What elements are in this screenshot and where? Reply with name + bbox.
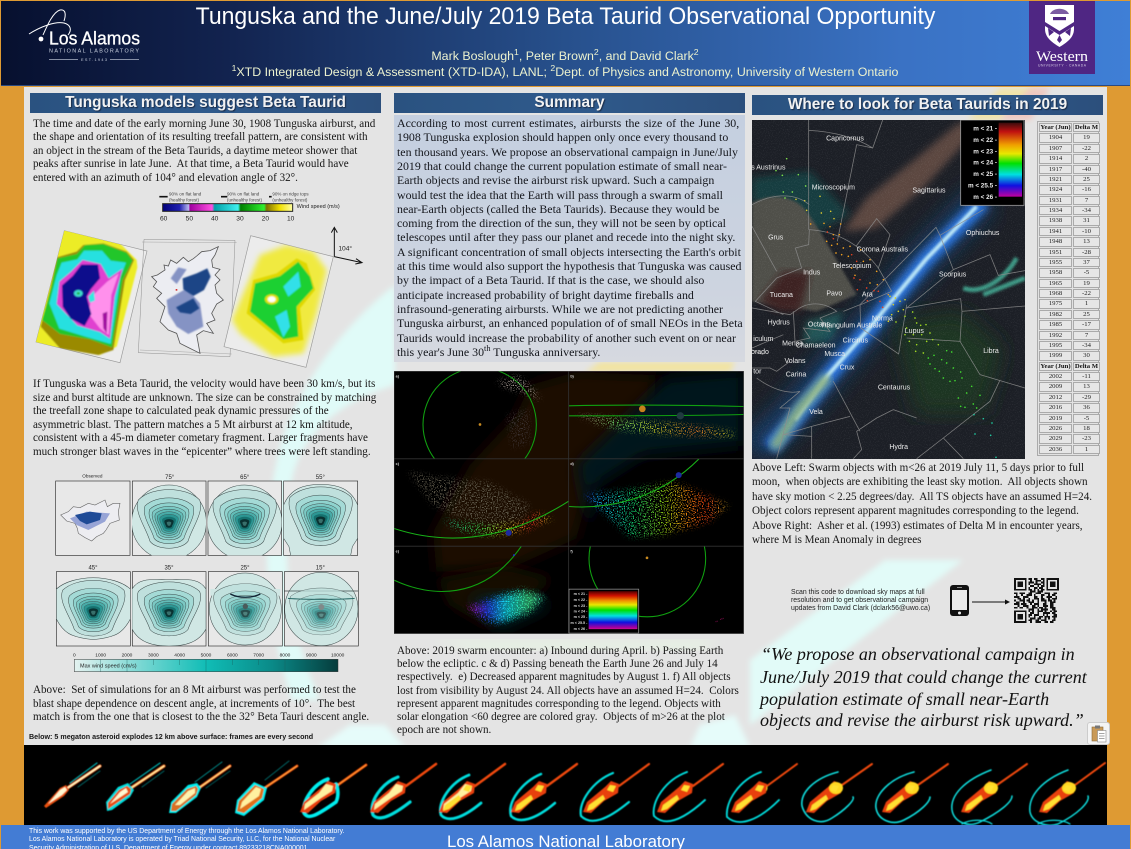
text block: swarm encounter caption: respectively. e) Decreased apparent magnitudes by August 1. f) All objects <box>397 671 731 683</box>
constellation labels: Musca <box>824 351 845 358</box>
constellation labels: Circinus <box>843 337 868 344</box>
table: Asher Delta M estimates: 1938 <box>1049 217 1062 224</box>
legend: max wind speed <box>73 653 345 672</box>
text block: Beta Taurid velocity: If Tunguska was a Beta Taurid, the velocity would have been 30 km/s, but its <box>33 378 375 390</box>
text block: swarm encounter caption: Above: 2019 swarm encounter: a) Inbound during April. b) Passing Earth <box>397 645 723 657</box>
panel e: decreased apparent magnitudes <box>394 546 550 628</box>
constellation labels: Corona Australis <box>857 246 909 253</box>
heading: Summary: Summary <box>534 94 605 111</box>
text block: swarm encounter caption <box>397 645 739 736</box>
title: Tunguska and the June/July 2019 Beta Taurid Observational Opportunity <box>196 3 935 30</box>
affiliations: 1XTD Integrated Design & Assessment (XTD-IDA), LANL; 2Dept. of Physics and Astronomy, University of Western Ontario <box>232 63 898 79</box>
map: right model <box>224 236 333 367</box>
text block: Beta Taurid velocity: asymmetric blast. The pattern matches a 5 Mt airburst at 12 km altitude, <box>33 418 353 430</box>
legend: apparent magnitude: m < 22 - <box>973 137 997 144</box>
text block: Tunguska intro: the shape and orientation of its resulting treefall pattern, are consistent with <box>33 131 368 143</box>
table: Asher Delta M estimates: 1982 <box>1049 311 1062 318</box>
chart: sky map <box>752 120 1025 459</box>
text block: summary <box>394 115 745 362</box>
frame 14 <box>952 764 1027 824</box>
table: Asher Delta M estimates: 13 <box>1083 383 1090 390</box>
text block: summary: at this time would also support the hypothesis that Tunguska was caused <box>397 259 741 273</box>
table: Asher Delta M estimates: -29 <box>1082 394 1091 401</box>
legend: wind speed colour bar: Wind speed (m/s) <box>297 204 340 210</box>
text block: QR code instructions: Scan this code to download sky maps at full <box>791 589 925 596</box>
constellation boundaries <box>752 120 1025 459</box>
legend: max wind speed: 8000 <box>280 653 291 659</box>
constellation labels: Telescopium <box>833 263 872 270</box>
constellation labels: Norma <box>872 316 893 323</box>
panel a: inbound during April: a) <box>396 375 400 379</box>
text block: swarm encounter caption: solar elongation <60 degree are colored gray. Objects of m>26 at the plot <box>397 711 725 723</box>
table: Asher Delta M estimates: 7 <box>1085 197 1088 204</box>
legend: apparent magnitude <box>569 589 639 633</box>
constellation labels: Microscopium <box>812 184 855 191</box>
text block: sky map caption <box>752 462 1092 546</box>
constellation labels: Capricornus <box>826 136 864 143</box>
table: Asher Delta M estimates: 1934 <box>1049 207 1062 214</box>
table: Asher Delta M estimates: 19 <box>1083 280 1090 287</box>
constellation labels: Pavo <box>826 290 842 297</box>
panel: observed: Observed <box>82 473 103 478</box>
table: Asher Delta M estimates: 2019 <box>1049 414 1062 422</box>
panel c: passing beneath Earth June 26 <box>394 462 569 538</box>
panel: poster background <box>24 87 1107 747</box>
table: Asher Delta M estimates: -10 <box>1082 228 1091 235</box>
text block: simulation caption: blast shape dependence on descent angle, at increments of 10°. The best <box>33 698 355 710</box>
table: Asher Delta M estimates: 1955 <box>1049 259 1062 266</box>
panel f: all objects lost from visibility <box>570 546 724 622</box>
panel: 35 degrees: 35° <box>164 566 174 572</box>
table: Asher Delta M estimates: 1992 <box>1049 332 1062 338</box>
frame 8 <box>510 764 577 820</box>
legend: wind speed colour bar <box>159 192 340 223</box>
constellation labels: Crux <box>840 364 855 371</box>
legend: max wind speed: 6000 <box>227 653 238 659</box>
asteroid dots <box>776 159 996 457</box>
logo: Los Alamos National Laboratory: EST.1943 <box>81 58 107 62</box>
frame 11 <box>727 764 797 822</box>
constellation labels: Hydrus <box>768 320 790 327</box>
constellation labels: Lupus <box>905 328 924 335</box>
table: Asher Delta M estimates: 1907 <box>1049 145 1062 152</box>
text block: summary: 1908 Tunguska explosion should happen only once every thousand to <box>397 130 728 144</box>
legend: max wind speed: 3000 <box>148 653 159 659</box>
legend: wind speed colour bar: (unhealthy forest) <box>227 198 263 203</box>
text block: swarm encounter caption: represent apparent magnitudes corresponding to the legend. Objects with <box>397 698 721 710</box>
constellation labels: Sagittarius <box>912 187 946 194</box>
table: Asher Delta M estimates: 1958 <box>1049 269 1062 276</box>
table: Asher Delta M estimates: 1917 <box>1049 166 1062 172</box>
footer: funding text <box>29 828 344 849</box>
text block: summary: A significant concentration of small objects intersecting the Earth's orbit <box>397 245 741 259</box>
text block: Beta Taurid velocity: the treefall zone shape to calculated peak dynamic pressures of the <box>33 405 329 417</box>
logo: Los Alamos National Laboratory: NATIONAL LABORATORY <box>49 48 139 54</box>
legend: apparent magnitude: m < 23 - <box>973 148 997 155</box>
text block: simulation caption <box>33 684 369 723</box>
table: Asher Delta M estimates: 1968 <box>1049 290 1062 297</box>
table: Asher Delta M estimates: -22 <box>1082 145 1091 152</box>
heading: Tunguska models <box>30 93 381 113</box>
text block: summary: According to most current estimates, airbursts the size of the June 30, <box>397 116 739 130</box>
chart: treefall wind speed maps <box>36 192 364 368</box>
panel c: passing beneath Earth June 26: c) <box>396 462 400 466</box>
table: Asher Delta M estimates: 1985 <box>1049 321 1062 328</box>
table: Asher Delta M estimates: 36 <box>1083 404 1090 411</box>
frame 6 <box>370 764 436 818</box>
legend: wind speed colour bar: 90% on flat land <box>227 192 260 197</box>
heading: Summary <box>394 93 745 113</box>
text block: Tunguska intro: The time and date of the early morning June 30, 1908 Tunguska airburst, and <box>33 118 375 130</box>
legend: wind speed colour bar: (unhealthy forest) <box>272 198 308 203</box>
table: Asher Delta M estimates: 1904 <box>1049 134 1062 141</box>
table: Asher Delta M estimates <box>1037 121 1099 456</box>
text block: summary: this year's June 30th Tunguska anniversary. <box>397 344 600 359</box>
table: Asher Delta M estimates: 2002 <box>1049 373 1062 380</box>
text block: summary: by the impact of a Beta Taurid. If that is the case, we should also <box>397 273 704 287</box>
constellation labels: Libra <box>983 348 999 355</box>
table: Asher Delta M estimates: 1941 <box>1049 228 1062 235</box>
heading: Tunguska models: Tunguska models suggest Beta Taurid <box>65 94 346 111</box>
panel d: passing beneath Earth July 14: d) <box>570 462 575 466</box>
table: Asher Delta M estimates: -17 <box>1082 321 1091 328</box>
text block: QR code instructions: resolution and to get observational campaign <box>791 597 928 604</box>
icon: QR code <box>1014 578 1059 623</box>
table: Asher Delta M estimates: 1965 <box>1049 280 1062 287</box>
table: Asher Delta M estimates: 2012 <box>1049 394 1062 401</box>
constellation labels <box>751 136 1000 451</box>
table: Asher Delta M estimates: Delta M <box>1075 124 1098 131</box>
constellation labels: tor <box>753 369 762 376</box>
legend: apparent magnitude: m < 25.5 - <box>968 183 997 190</box>
constellation labels: Mensa <box>782 340 803 347</box>
table: Asher Delta M estimates: -22 <box>1082 290 1091 297</box>
legend: wind speed colour bar: 30 <box>236 216 244 223</box>
table: Asher Delta M estimates: -34 <box>1082 342 1091 349</box>
constellation labels: Carina <box>786 372 806 379</box>
frame 15 <box>1030 763 1105 825</box>
panel: 45 degrees <box>56 566 130 646</box>
text block: summary: Earth objects and revise the airburst risk upward. Such a campaign <box>397 173 714 187</box>
quote: population estimate of small near-Earth <box>760 689 1049 709</box>
table: Asher Delta M estimates: 37 <box>1083 259 1090 266</box>
frame 13 <box>876 764 948 822</box>
text block: summary: Taurids would increase the probability of another such event on or near <box>397 330 736 344</box>
footer band <box>1 825 1130 849</box>
table: Asher Delta M estimates: 25 <box>1083 176 1090 183</box>
table: Asher Delta M estimates: Delta M <box>1075 363 1098 370</box>
table: Asher Delta M estimates: 31 <box>1083 217 1090 224</box>
text block: summary: telescopes until after they pass our planet and recede into the night sky. <box>397 230 735 244</box>
constellation labels: Grus <box>768 235 784 242</box>
legend: apparent magnitude: m < 25 - <box>574 615 588 619</box>
panel b: passing Earth below the ecliptic <box>569 374 744 437</box>
panel d: passing beneath Earth July 14 <box>569 459 729 537</box>
frame 5 <box>300 765 366 816</box>
table: Asher Delta M estimates: 2029 <box>1049 435 1062 442</box>
icon: clipboard <box>1087 722 1110 745</box>
legend: apparent magnitude: m < 26 - <box>973 194 997 201</box>
table: Asher Delta M estimates: -16 <box>1082 186 1091 193</box>
frame 12 <box>802 764 872 822</box>
text block: simulation caption: match is from the one that is closest to the the 32° Beta Tauri descent angle. <box>33 711 369 723</box>
table: Asher Delta M estimates: 1951 <box>1049 248 1062 256</box>
text block: sky map caption: Object colors represent apparent magnitudes corresponding to the legend. <box>752 505 1079 517</box>
legend: max wind speed: 7000 <box>253 653 264 659</box>
panel: 75 degrees: 75° <box>165 475 175 481</box>
constellation labels: Centaurus <box>878 384 911 391</box>
text block: swarm encounter caption: lost from visibility by August 24. All objects have an assumed H=24. Colors <box>397 685 739 697</box>
legend: wind speed colour bar: 40 <box>211 216 219 223</box>
panel: 75 degrees <box>132 475 206 560</box>
table: Asher Delta M estimates: 1975 <box>1049 300 1062 307</box>
legend: apparent magnitude: m < 24 - <box>973 160 997 167</box>
logo: Los Alamos National Laboratory <box>28 9 140 62</box>
text block: summary: near-Earth objects (called the Beta Taurids). Because they would be <box>397 202 719 216</box>
panel e: decreased apparent magnitudes: e) <box>396 550 400 554</box>
frame 7 <box>439 764 505 819</box>
legend: wind speed colour bar: 60 <box>160 216 168 223</box>
text block: Beta Taurid velocity <box>33 378 376 458</box>
panel b: passing Earth below the ecliptic: b) <box>570 375 575 379</box>
constellation labels: Chamaeleon <box>796 342 836 349</box>
panel: 65 degrees <box>207 475 282 560</box>
table: Asher Delta M estimates: -5 <box>1084 269 1089 276</box>
constellation labels: Volans <box>784 358 806 365</box>
legend: max wind speed: 0 <box>73 653 76 659</box>
quote <box>759 644 1088 730</box>
legend: apparent magnitude: m < 21 - <box>574 592 588 596</box>
table: Asher Delta M estimates: 19 <box>1083 134 1090 141</box>
heading: Where to look: Where to look for Beta Taurids in 2019 <box>788 96 1067 113</box>
table: Asher Delta M estimates: 2 <box>1085 155 1088 162</box>
frame 3 <box>169 762 230 813</box>
panel a: inbound during April <box>396 372 542 458</box>
quote: June/July 2019 that could change the current <box>760 667 1087 687</box>
panel: 25 degrees: 25° <box>240 566 250 572</box>
legend: max wind speed: 5000 <box>201 653 212 659</box>
table: Asher Delta M estimates: 25 <box>1083 311 1090 318</box>
logo: Los Alamos National Laboratory: Los Alamos <box>49 28 140 48</box>
table: Asher Delta M estimates: 1914 <box>1049 155 1062 162</box>
table: Asher Delta M estimates: 30 <box>1083 352 1090 359</box>
text block: sky map caption: where M is Mean Anomaly in degrees <box>752 534 921 546</box>
constellation labels: s Austrinus <box>752 164 786 171</box>
legend: wind speed colour bar: 20 <box>262 216 269 223</box>
text block: QR code instructions: updates from David Clark (dclark56@uwo.ca) <box>791 605 930 612</box>
authors: Mark Boslough1, Peter Brown2, and David Clark2 <box>431 47 699 63</box>
table: Asher Delta M estimates: -5 <box>1084 414 1089 422</box>
constellation labels: Tucana <box>770 292 793 299</box>
legend: max wind speed: 2000 <box>122 653 133 659</box>
icon: phone <box>950 585 969 616</box>
legend: max wind speed: 9000 <box>306 653 317 659</box>
table: Asher Delta M estimates: 1 <box>1085 300 1088 307</box>
constellation labels: Octans <box>808 321 831 328</box>
legend: apparent magnitude: m < 21 - <box>973 126 997 133</box>
text block: Tunguska intro: an object in the stream of the Beta Taurids, a daytime meteor shower that <box>33 145 357 157</box>
legend: apparent magnitude: m < 25.5 - <box>571 621 588 625</box>
chart: 2019 swarm encounter panels <box>394 371 744 634</box>
constellation labels: Scorpius <box>939 272 967 279</box>
legend: apparent magnitude: m < 24 - <box>574 610 588 614</box>
table: Asher Delta M estimates: 1948 <box>1049 238 1062 245</box>
table: Asher Delta M estimates: 1999 <box>1049 352 1062 359</box>
text block: Tunguska intro: peaks after sunrise in late June. At that time, a Beta Taurid would have <box>33 158 349 170</box>
constellation labels: Ara <box>862 292 873 299</box>
table: Asher Delta M estimates: -23 <box>1082 435 1091 442</box>
table: Asher Delta M estimates: 1924 <box>1049 186 1062 193</box>
table: Asher Delta M estimates: -34 <box>1082 207 1091 214</box>
legend: apparent magnitude: m < 25 - <box>973 171 997 178</box>
text block: sky map caption: Above Left: Swarm objects with m<26 at 2019 July 11, 5 days prior to full <box>752 462 1084 474</box>
heading: Where to look <box>752 95 1103 115</box>
text block: Tunguska intro: entered with an azimuth of 104° and elevation angle of 32°. <box>33 172 298 184</box>
text block: QR code instructions <box>791 588 930 612</box>
panel: 55 degrees: 55° <box>316 475 325 481</box>
frame 1 <box>44 763 100 808</box>
quote: objects and revise the airburst risk upward.” <box>760 710 1084 730</box>
text block: swarm encounter caption: below the ecliptic. c & d) Passing beneath the Earth June 26 and July 14 <box>397 658 718 670</box>
text block: Beta Taurid velocity: much stronger blast waves in the “epicenter” where trees were left standing. <box>33 446 371 458</box>
legend: wind speed colour bar: 90% on flat land <box>169 192 202 197</box>
text block: Beta Taurid velocity: size and burst altitude are unknown. The size can be constrained by matching <box>33 392 376 404</box>
text block: Beta Taurid velocity: consistent with a 45-m diameter cometary fragment. Larger fragments have <box>33 432 368 444</box>
legend: max wind speed: 1000 <box>95 653 106 659</box>
text block: summary: would test the idea that the Earth will pass through a swarm of small <box>397 188 723 202</box>
quote: “We propose an observational campaign in <box>761 644 1075 664</box>
legend: wind speed colour bar: (healthy forest) <box>169 198 200 203</box>
table: Asher Delta M estimates: 1 <box>1085 446 1088 453</box>
logo: Western University: Western <box>1036 49 1089 65</box>
text block: summary: infrasound-generating airbursts. While we are not predicting another <box>397 302 723 316</box>
text block: simulation caption: Above: Set of simulations for an 8 Mt airburst was performed to test the <box>33 684 356 696</box>
arrow: azimuth 104 degrees <box>331 227 362 264</box>
map: left model <box>33 227 147 363</box>
arrow: azimuth 104 degrees: 104° <box>338 245 352 253</box>
table: Asher Delta M estimates: 2016 <box>1049 404 1062 411</box>
legend: max wind speed: 4000 <box>174 653 185 659</box>
legend: wind speed colour bar: 50 <box>186 216 193 223</box>
text block: sky map caption: moon, when objects are exhibiting the least sky motion. All objects shown <box>752 476 1088 488</box>
constellation labels: Hydra <box>889 444 908 451</box>
table: Asher Delta M estimates: 18 <box>1083 425 1090 432</box>
panel: 15 degrees <box>284 566 358 646</box>
text block: sky map caption: Above Right: Asher et al. (1993) estimates of Delta M in encounter years, <box>752 520 1083 532</box>
table: Asher Delta M estimates: 1995 <box>1049 342 1062 349</box>
panel: 15 degrees: 15° <box>316 566 325 572</box>
header band <box>1 1 1130 86</box>
constellation labels: Ophiuchus <box>966 230 1000 237</box>
text block: summary: Tunguska airburst, an enhanced population of of small NEOs in the Beta <box>397 316 743 330</box>
legend: apparent magnitude <box>961 120 1024 205</box>
logo: Western University <box>1029 1 1095 74</box>
text block: summary: anticipate increased probability of bright daytime fireballs and <box>397 288 694 302</box>
logo: Western University: UNIVERSITY · CANADA <box>1038 64 1087 68</box>
constellation labels: Triangulum Australe <box>820 322 882 329</box>
frame 4 <box>235 761 297 816</box>
text block: sky map caption: have sky motion < 2.25 degrees/day. All TS objects have an assumed H=24. <box>752 491 1092 503</box>
frame 9 <box>581 764 649 821</box>
table: Asher Delta M estimates: -40 <box>1082 166 1091 172</box>
table: Asher Delta M estimates: 1931 <box>1049 197 1062 204</box>
panel: 45 degrees: 45° <box>88 566 98 572</box>
panel: 35 degrees <box>132 566 206 646</box>
table: Asher Delta M estimates: 2026 <box>1049 425 1062 432</box>
table: Asher Delta M estimates: 13 <box>1083 238 1090 245</box>
frame 10 <box>654 764 723 821</box>
footer: funding text: Los Alamos National Laboratory is operated by Triad National Security, LLC, for the National Nuclear <box>29 836 335 843</box>
footer: funding text: This work was supported by the US Department of Energy through the Los Alamos National Laboratory. <box>29 828 344 835</box>
table: Asher Delta M estimates: -28 <box>1082 248 1091 256</box>
text block: summary: 2019 that could change the current population estimate of small near- <box>397 159 727 173</box>
text block: Tunguska intro <box>33 118 376 184</box>
arrow: phone to QR code <box>972 600 1010 604</box>
table: Asher Delta M estimates: Year (Jun) <box>1040 363 1071 370</box>
frame 2 <box>106 763 164 811</box>
text block: summary: coming from the direction of the sun, they will not be seen by optical <box>397 216 726 230</box>
constellation labels: Indus <box>803 269 821 276</box>
legend: wind speed colour bar: 10 <box>287 216 295 223</box>
constellation labels: iculum <box>753 336 774 343</box>
legend: apparent magnitude: m < 23 - <box>574 604 588 608</box>
legend: apparent magnitude: m < 26 - <box>574 627 588 631</box>
panel: 55 degrees <box>284 475 358 555</box>
map: observed treefall <box>138 239 237 357</box>
legend: apparent magnitude: m < 22 - <box>574 598 588 602</box>
text block: summary: ten thousand years. We propose an observational campaign in June/July <box>397 145 738 159</box>
panel: observed <box>56 473 130 555</box>
panel: 25 degrees <box>208 566 282 646</box>
table: Asher Delta M estimates: 7 <box>1085 332 1088 338</box>
chart: descent angle simulations <box>55 473 359 672</box>
panel f: all objects lost from visibility: f) <box>570 550 574 554</box>
table: Asher Delta M estimates: 1921 <box>1049 176 1062 183</box>
table: Asher Delta M estimates: 2036 <box>1049 446 1062 453</box>
table: Asher Delta M estimates: 2009 <box>1049 383 1062 390</box>
caption: asteroid frames: Below: 5 megaton asteroid explodes 12 km above surface: frames are every second <box>29 733 313 741</box>
legend: max wind speed: 10000 <box>331 653 345 659</box>
text block: swarm encounter caption: epoch are not shown. <box>397 724 491 736</box>
constellation labels: Vela <box>809 409 823 416</box>
table: Asher Delta M estimates: Year (Jun) <box>1040 124 1071 131</box>
table: Asher Delta M estimates: -11 <box>1082 373 1091 380</box>
legend: max wind speed: Max wind speed (cm/s) <box>80 663 137 669</box>
legend: wind speed colour bar: 90% on ridge tops <box>272 192 309 197</box>
panel: asteroid airburst animation frames <box>24 745 1107 826</box>
panel: 65 degrees: 65° <box>240 475 250 481</box>
